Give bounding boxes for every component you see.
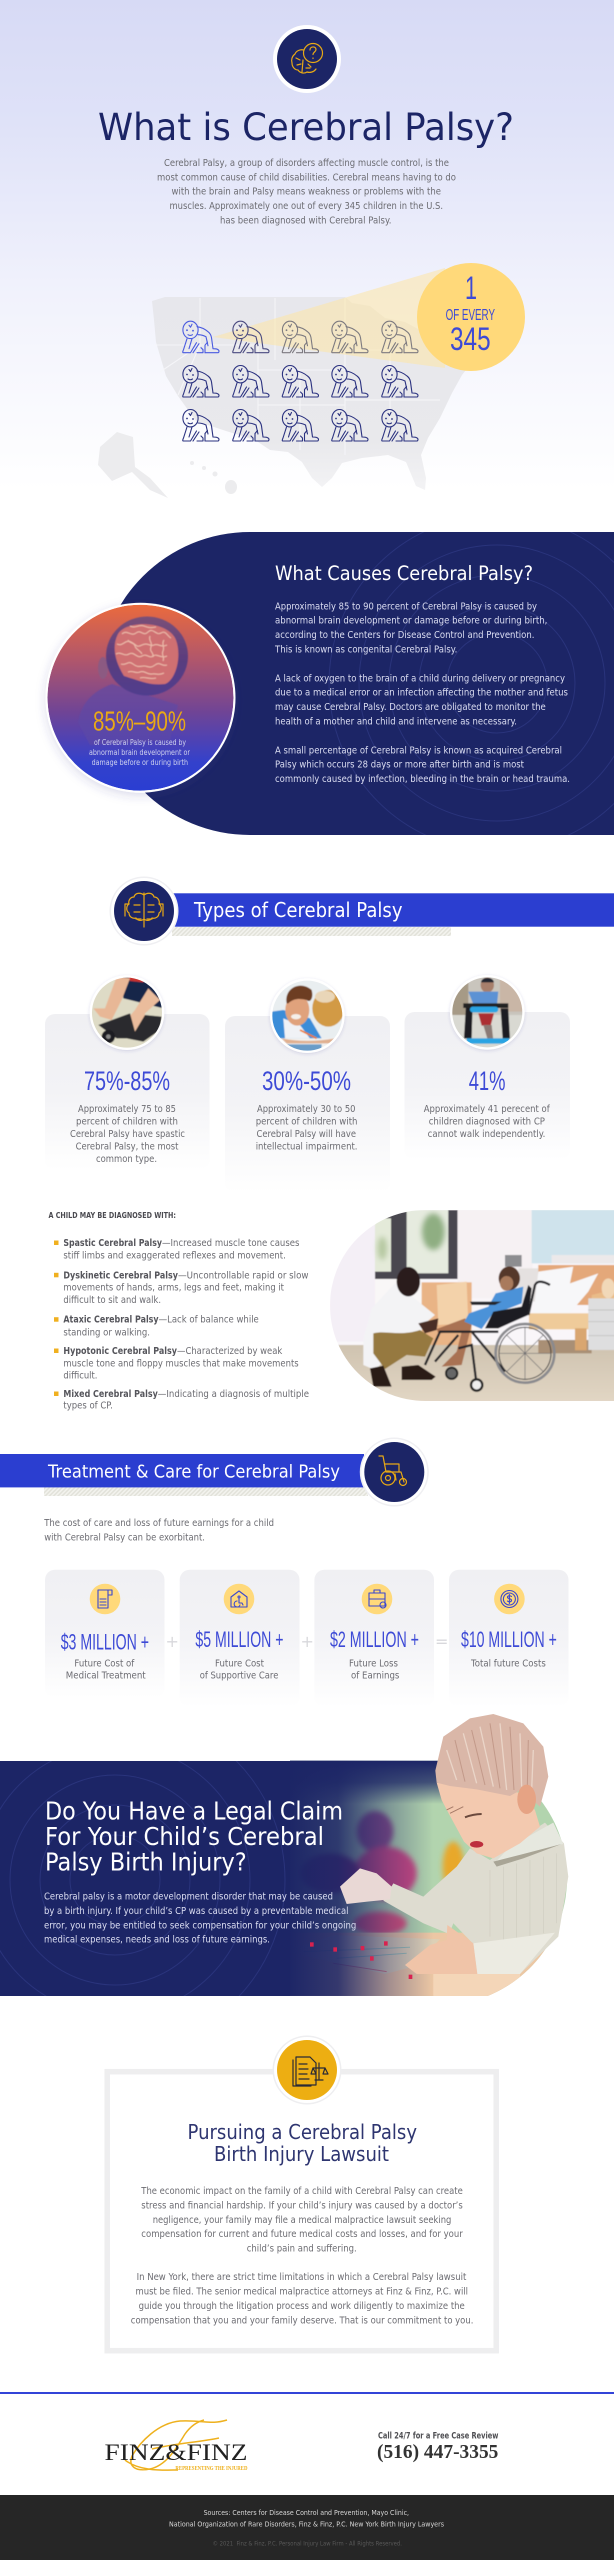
operator plus: +	[166, 1632, 179, 1651]
body text: by a birth injury. If your child’s CP was caused by a preventable medical	[44, 1906, 348, 1917]
card: loss of earnings: $2 MILLION +	[330, 1627, 419, 1652]
body text: A small percentage of Cerebral Palsy is known as acquired Cerebral	[275, 745, 562, 756]
hypotonic item: Hypotonic Cerebral Palsy	[63, 1346, 177, 1357]
card: supportive care: Future Cost	[215, 1658, 264, 1669]
card: medical treatment: Future Cost of	[74, 1658, 135, 1669]
card: loss of earnings: Future Loss	[349, 1658, 398, 1669]
card: loss of earnings: of Earnings	[351, 1671, 400, 1682]
ataxic item	[54, 1315, 259, 1338]
intro text: with the brain and Palsy means weakness or problems with the	[172, 187, 441, 198]
icon: brain circuit	[110, 876, 178, 946]
body text	[131, 2186, 473, 2326]
operator equals: =	[435, 1632, 448, 1651]
treatment intro text: with Cerebral Palsy can be exorbitant.	[44, 1532, 205, 1543]
card: spastic: percent of children with	[76, 1117, 178, 1128]
card: medical treatment: $3 MILLION +	[61, 1629, 149, 1654]
card: intellectual impairment: intellectual impairment.	[256, 1142, 358, 1153]
card: spastic	[45, 975, 210, 1170]
card: cannot walk: 41%	[469, 1066, 506, 1096]
body text: according to the Centers for Disease Control and Prevention.	[275, 630, 534, 641]
card: spastic: common type.	[96, 1154, 157, 1165]
card: total costs: Total future Costs	[470, 1658, 546, 1669]
panel: cost cards	[45, 1570, 568, 1707]
spastic item: stiff limbs and exaggerated reflexes and movement.	[63, 1251, 286, 1262]
mixed item: Mixed Cerebral Palsy	[63, 1389, 158, 1400]
body text: error, you may be entitled to seek compensation for your child’s ongoing	[44, 1920, 356, 1931]
hypotonic item: difficult.	[63, 1371, 98, 1382]
ataxic item: Ataxic Cerebral Palsy	[63, 1315, 159, 1326]
treatment intro text: The cost of care and loss of future earnings for a child	[43, 1518, 274, 1529]
operator plus: +	[300, 1632, 314, 1651]
dyskinetic item	[54, 1270, 309, 1306]
card: cannot walk: Approximately 41 perecent of	[424, 1104, 550, 1115]
card: intellectual impairment	[225, 978, 390, 1152]
heading: What Causes Cerebral Palsy?	[275, 562, 533, 585]
heading: Palsy Birth Injury?	[45, 1848, 247, 1877]
list heading: A CHILD MAY BE DIAGNOSED WITH:	[48, 1211, 176, 1220]
body text: may cause Cerebral Palsy. Doctors are obligated to monitor the	[275, 702, 546, 713]
body text: A lack of oxygen to the brain of a child during delivery or pregnancy	[275, 673, 565, 684]
body text: medical expenses, needs and loss of future earnings.	[44, 1935, 270, 1946]
card: medical treatment	[45, 1570, 164, 1698]
heading: Birth Injury Lawsuit	[214, 2142, 389, 2166]
body text: In New York, there are strict time limitations in which a Cerebral Palsy lawsuit	[137, 2272, 467, 2283]
mixed item: —Indicating a diagnosis of multiple	[158, 1389, 309, 1400]
card: loss of earnings	[314, 1570, 434, 1707]
card: supportive care: $5 MILLION +	[195, 1627, 284, 1652]
statistic caption: abnormal brain development or	[89, 748, 191, 757]
card: cannot walk	[404, 974, 570, 1139]
icon: accessible home	[231, 1591, 247, 1607]
card: cannot walk: cannot walk independently.	[428, 1129, 545, 1140]
heading: Pursuing a Cerebral Palsy	[188, 2120, 417, 2144]
body text: health of a mother and child and intervene as necessary.	[275, 716, 517, 727]
statistic 85%-90%: 85%–90%	[93, 706, 186, 737]
card: intellectual impairment: Approximately 30 to 50	[257, 1104, 356, 1115]
dyskinetic item: —Uncontrollable rapid or slow	[178, 1270, 309, 1281]
icon: wheelchair	[360, 1438, 429, 1506]
divider line	[0, 2392, 614, 2394]
body text: Cerebral palsy is a motor development disorder that may be caused	[44, 1892, 333, 1903]
card: spastic: Cerebral Palsy, the most	[76, 1142, 179, 1153]
statistic caption	[89, 738, 191, 767]
dyskinetic item: movements of hands, arms, legs and feet, making it	[63, 1283, 284, 1294]
body text: compensation that you and your family deserve. That is our commitment to you.	[131, 2315, 473, 2326]
treatment intro text	[43, 1518, 274, 1543]
hypotonic item: —Characterized by weak	[177, 1346, 283, 1357]
body text: This is known as congenital Cerebral Palsy.	[274, 644, 457, 655]
card: intellectual impairment: Cerebral Palsy will have	[256, 1129, 356, 1140]
heading banner: treatment and care: Treatment & Care for Cerebral Palsy	[47, 1461, 340, 1482]
card: total costs: $10 MILLION +	[461, 1627, 557, 1652]
contact: Call 24/7 for a Free Case Review	[378, 2432, 498, 2442]
callout beam	[213, 268, 445, 368]
body text: due to a medical error or an infection affecting the mother and fetus	[275, 688, 568, 699]
mixed item: types of CP.	[63, 1401, 113, 1412]
icon: briefcase	[369, 1590, 386, 1608]
intro text: most common cause of child disabilities. Cerebral means having to do	[157, 172, 456, 183]
top gradient background	[0, 0, 614, 490]
body text: The economic impact on the family of a child with Cerebral Palsy can create	[140, 2186, 463, 2197]
heading banner: types of cerebral palsy: Types of Cerebral Palsy	[193, 898, 403, 922]
card: supportive care: of Supportive Care	[200, 1671, 279, 1682]
photo: child's legs	[90, 975, 167, 1052]
body text: negligence, your family may file a medical malpractice lawsuit seeking	[153, 2215, 451, 2226]
body text: Approximately 85 to 90 percent of Cerebral Palsy is caused by	[275, 601, 537, 612]
photo circle with statistic	[46, 603, 236, 793]
statistic caption: of Cerebral Palsy is caused by	[94, 738, 186, 747]
body text: compensation for current and future medical costs and losses, and for your	[141, 2229, 463, 2240]
title: What is Cerebral Palsy?	[98, 106, 514, 149]
copyright: © 2021 Finz & Finz, P.C. Personal Injury Law Firm - All Rights Reserved.	[213, 2540, 402, 2548]
icon: bill	[98, 1590, 112, 1608]
section: what is cerebral palsy	[0, 0, 614, 498]
panel: pursuing a lawsuit	[107, 2036, 496, 2351]
navy band	[0, 1761, 440, 1996]
photo: child in walker	[450, 975, 525, 1050]
spastic item: Spastic Cerebral Palsy	[63, 1238, 162, 1249]
card: medical treatment: Medical Treatment	[66, 1671, 146, 1682]
body text: child’s pain and suffering.	[247, 2243, 357, 2254]
card: spastic: 75%-85%	[84, 1066, 170, 1096]
body text: Palsy which occurs 28 days or more after birth and is most	[275, 760, 524, 771]
photo: smiling boy	[270, 978, 345, 1053]
heading: For Your Child’s Cerebral	[45, 1822, 324, 1851]
baby icons grid	[183, 321, 418, 441]
card: supportive care	[180, 1570, 300, 1707]
body text: guide you through the litigation process and work diligently to maximize the	[139, 2301, 465, 2312]
card: spastic: Approximately 75 to 85	[78, 1104, 176, 1115]
photo: boy playing with puzzle	[287, 1714, 573, 1996]
logo: finz and finz: FINZ&FINZ	[104, 2440, 248, 2465]
footer	[0, 2495, 614, 2560]
sources	[169, 2508, 444, 2528]
body text: must be filed. The senior medical malpractice attorneys at Finz & Finz, P.C. will	[136, 2286, 468, 2297]
intro text	[157, 158, 456, 226]
body text	[274, 601, 570, 785]
callout: 1 of every 345	[417, 263, 525, 371]
contact	[377, 2432, 499, 2463]
heading banner: treatment and care	[0, 1438, 429, 1506]
callout: 1 of every 345: 345	[450, 321, 491, 357]
heading: Do You Have a Legal Claim	[45, 1796, 343, 1825]
logo: finz and finz: REPRESENTING THE INJURED	[175, 2466, 248, 2472]
card: intellectual impairment: 30%-50%	[262, 1066, 351, 1096]
body text: commonly caused by infection, bleeding in the brain or head trauma.	[275, 774, 570, 785]
heading	[45, 1796, 343, 1877]
spastic item: —Increased muscle tone causes	[162, 1238, 300, 1249]
body text: abnormal brain development or damage before or during birth,	[275, 616, 547, 627]
callout: 1 of every 345: 1	[465, 270, 477, 306]
hypotonic item: muscle tone and floppy muscles that make movements	[63, 1358, 299, 1369]
panel: legal claim	[0, 1714, 568, 1996]
statistic caption: damage before or during birth	[92, 758, 188, 767]
spastic item	[54, 1238, 300, 1262]
hypotonic item	[54, 1346, 299, 1382]
card: intellectual impairment: percent of children with	[256, 1117, 358, 1128]
panel: what causes cerebral palsy	[46, 515, 614, 851]
logo: finz and finz	[104, 2420, 248, 2472]
card: cannot walk: children diagnosed with CP	[429, 1117, 545, 1128]
dyskinetic item: difficult to sit and walk.	[63, 1295, 161, 1306]
body text	[44, 1892, 356, 1946]
photo: doctor with child in wheelchair	[325, 1205, 614, 1405]
sources: Sources: Centers for Disease Control and Prevention, Mayo Clinic,	[204, 2508, 409, 2517]
card: spastic: Cerebral Palsy have spastic	[70, 1129, 185, 1140]
navy rounded panel	[99, 532, 614, 835]
callout: 1 of every 345: OF EVERY	[446, 307, 495, 324]
icon: dollar coin	[501, 1590, 518, 1608]
contact: (516) 447-3355	[377, 2442, 499, 2463]
dyskinetic item: Dyskinetic Cerebral Palsy	[63, 1270, 178, 1281]
heading	[188, 2120, 417, 2166]
list: diagnoses	[48, 1211, 309, 1412]
icon: brain with question mark	[273, 25, 341, 93]
intro text: muscles. Approximately one out of every 345 children in the U.S.	[170, 201, 443, 212]
body text: stress and financial hardship. If your child’s injury was caused by a doctor’s	[141, 2200, 463, 2211]
mixed item	[54, 1389, 309, 1412]
sources: National Organization of Rare Disorders, Finz & Finz, P.C. New York Birth Injury Lawyers	[169, 2520, 444, 2528]
map of the united states	[98, 297, 478, 498]
ataxic item: standing or walking.	[63, 1327, 150, 1338]
intro text: Cerebral Palsy, a group of disorders affecting muscle control, is the	[164, 158, 449, 169]
icon: legal document	[272, 2036, 342, 2104]
intro text: has been diagnosed with Cerebral Palsy.	[220, 215, 392, 226]
heading banner: types of cerebral palsy	[110, 876, 614, 946]
panel: type cards	[45, 974, 570, 1164]
card: total costs	[449, 1570, 568, 1707]
ataxic item: —Lack of balance while	[159, 1315, 259, 1326]
